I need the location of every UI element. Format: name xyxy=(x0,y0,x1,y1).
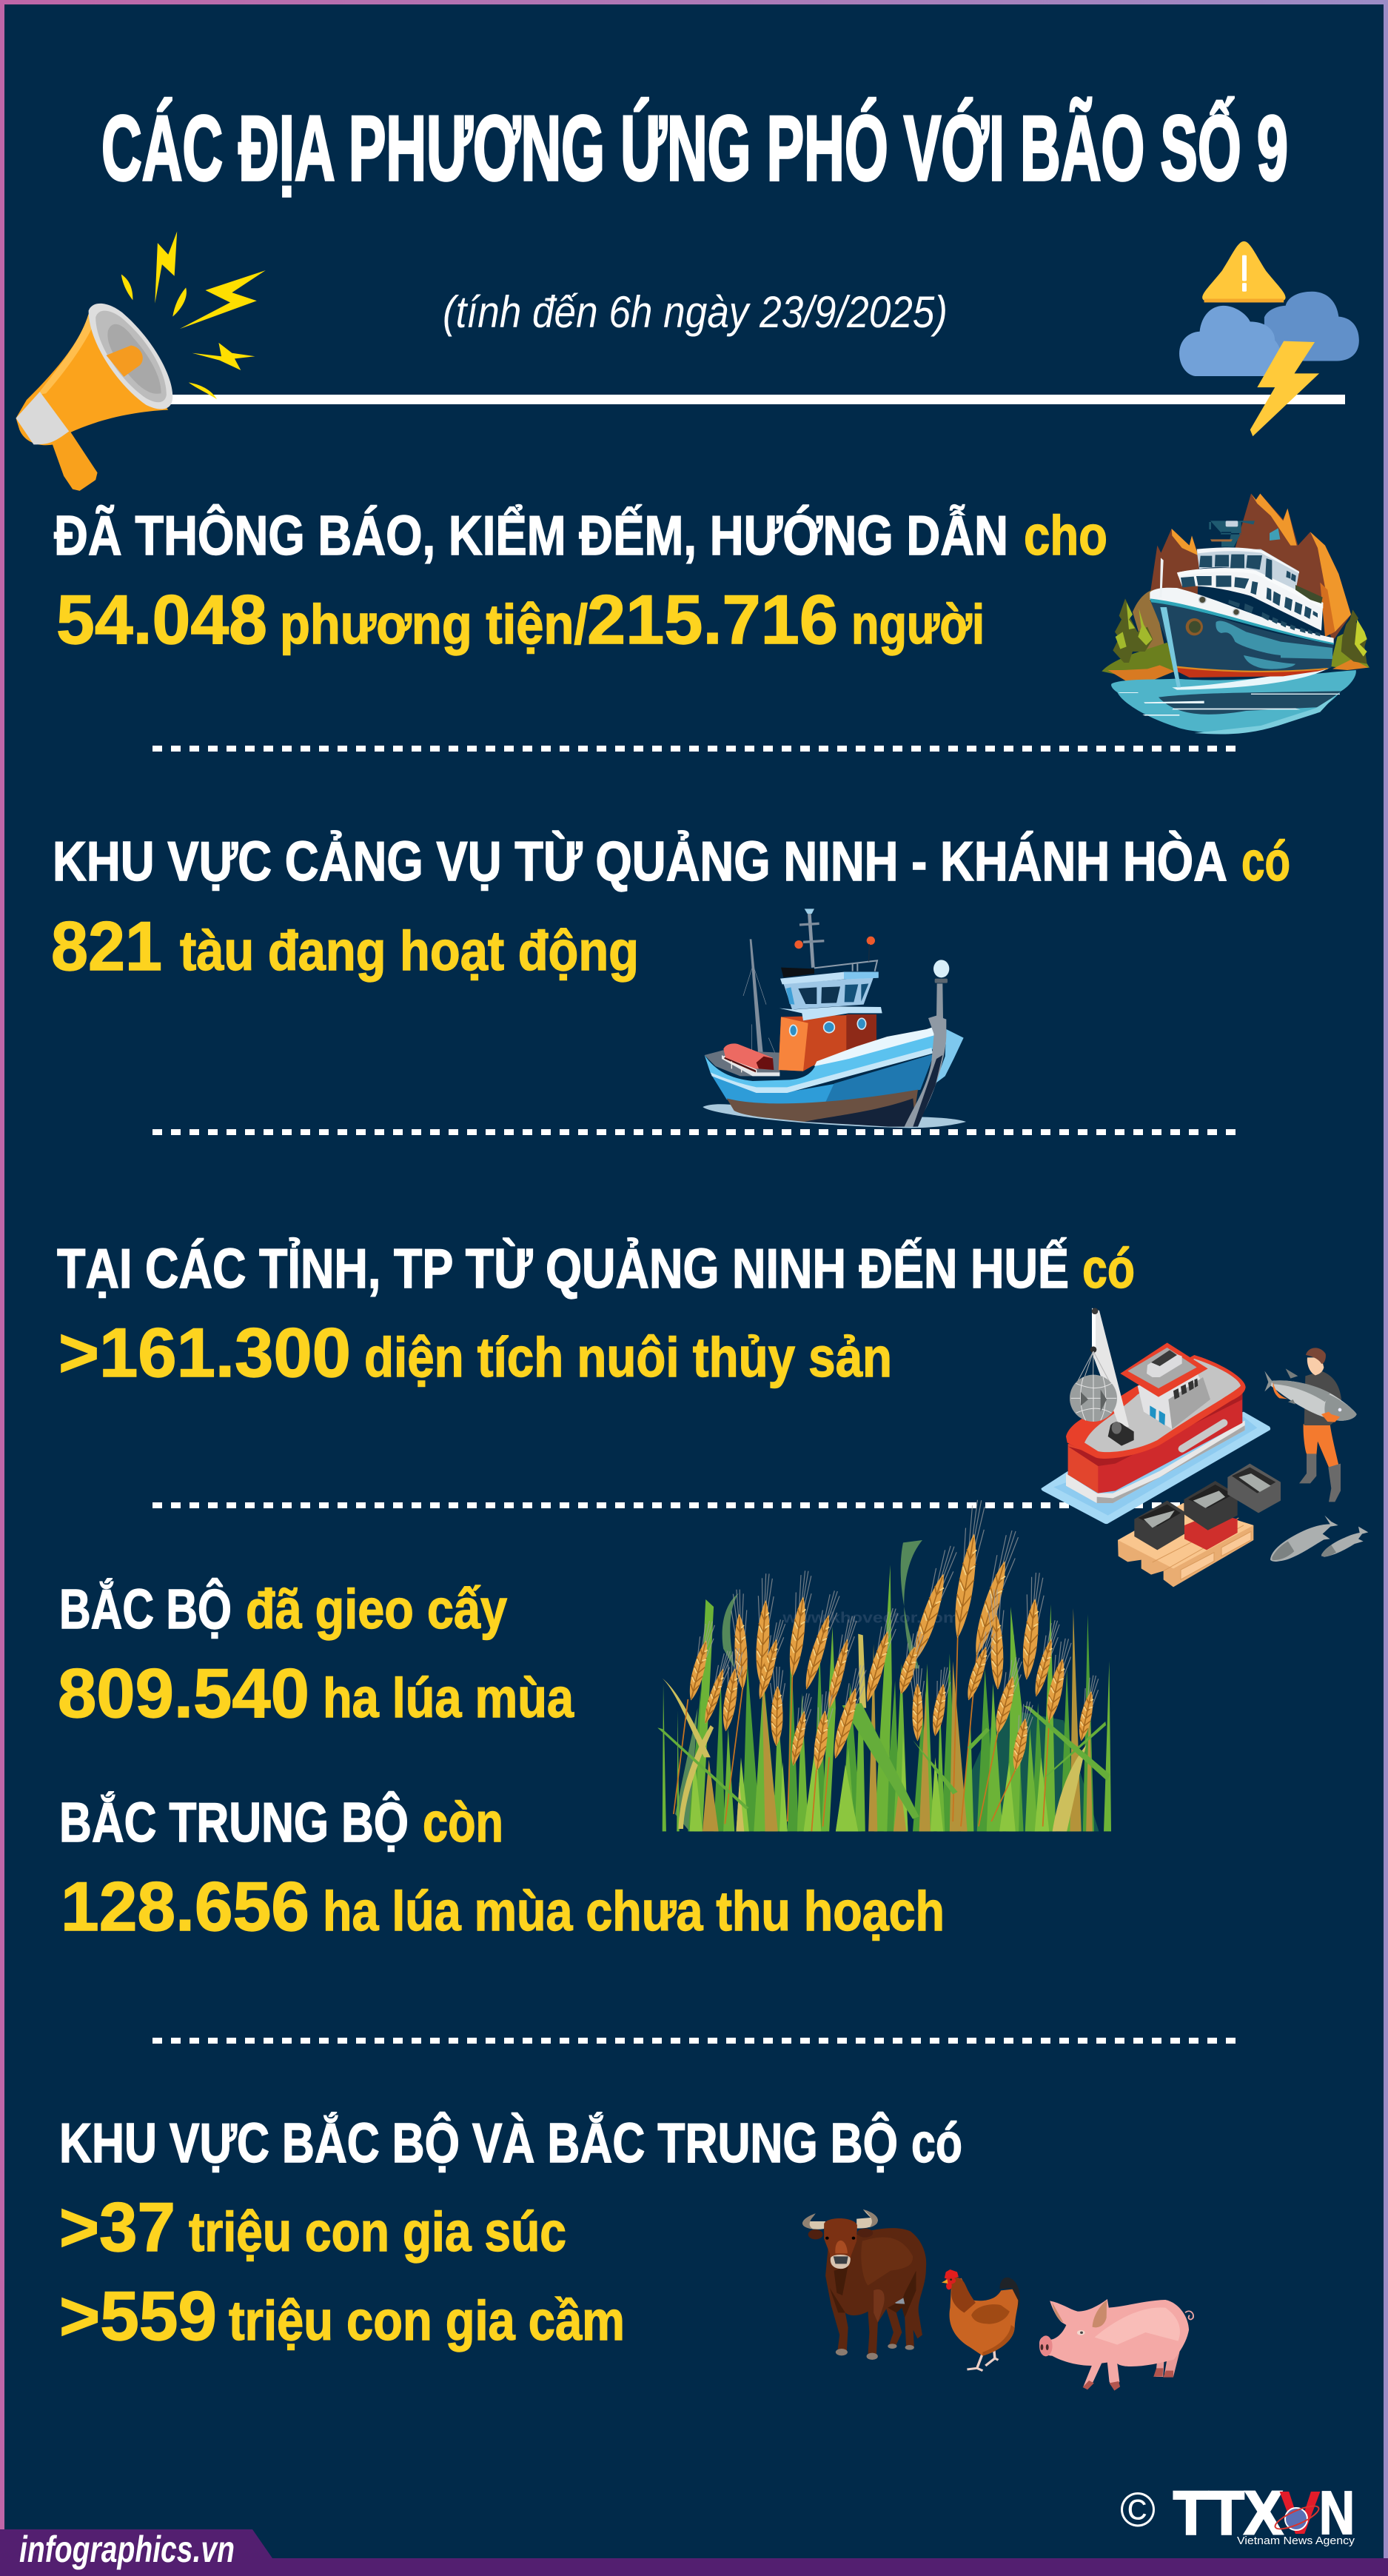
text block: rice north xyxy=(58,1578,574,1732)
text block: rice north central: BẮC TRUNG BỘ xyxy=(59,1791,409,1853)
water plate xyxy=(1042,1412,1270,1524)
text block: notified vessels and people: ĐÃ THÔNG BÁO, KIỂM ĐẾM, HƯỚNG DẪN xyxy=(54,504,1008,566)
text block: rice north: đã gieo cấy xyxy=(246,1578,507,1640)
text block: livestock: KHU VỰC BẮC BỘ VÀ BẮC TRUNG BỘ xyxy=(59,2112,898,2174)
pallet xyxy=(1118,1503,1253,1587)
big fish xyxy=(1271,1380,1357,1421)
logo: TTXVN: © xyxy=(1120,2482,1156,2537)
text block: livestock: có xyxy=(911,2112,962,2174)
icon: storm cloud with warning sign xyxy=(1179,241,1359,436)
crane and net xyxy=(1092,1308,1129,1429)
fish on ground xyxy=(1270,1516,1338,1562)
text block: notified vessels and people xyxy=(54,504,1107,658)
logo: TTXVN: Vietnam News Agency xyxy=(1237,2535,1355,2547)
text block: livestock: >37 xyxy=(59,2188,175,2266)
icon: trawler, crates, fisherman xyxy=(1042,1308,1368,1587)
logo: TTXVN: V xyxy=(1279,2478,1321,2547)
text block: livestock: triệu con gia cầm xyxy=(229,2289,625,2352)
cabin xyxy=(1138,1368,1210,1429)
text block: rice north central: còn xyxy=(423,1791,503,1853)
text block: aquaculture area xyxy=(57,1237,1135,1391)
icon: fishing boat xyxy=(703,909,966,1128)
text block: rice north: 809.540 xyxy=(58,1654,309,1732)
text block: rice north central: ha lúa mùa chưa thu hoạch xyxy=(323,1880,945,1942)
icon: rice field: www.khovector.com xyxy=(782,1610,959,1626)
footer: site name: infographics.vn xyxy=(19,2529,235,2570)
logo: TTXVN xyxy=(1120,2478,1355,2547)
dashed dividers xyxy=(152,749,1236,2041)
text block: aquaculture area: TẠI CÁC TỈNH, TP TỪ QUẢNG NINH ĐẾN HUẾ xyxy=(57,1237,1069,1299)
text block: notified vessels and people: 54.048 xyxy=(56,581,267,658)
subtitle: date: (tính đến 6h ngày 23/9/2025) xyxy=(443,287,948,337)
text block: livestock: triệu con gia súc xyxy=(189,2201,566,2263)
text block: vessels in port areas xyxy=(51,830,1290,985)
text block: livestock xyxy=(59,2112,962,2355)
text block: rice north: ha lúa mùa xyxy=(323,1667,574,1729)
text block: rice north: BẮC BỘ xyxy=(59,1578,232,1640)
text block: vessels in port areas: 821 xyxy=(51,907,162,985)
text block: notified vessels and people: phương tiện/ xyxy=(280,593,588,655)
icon: bull xyxy=(802,2209,926,2360)
text block: notified vessels and people: 215.716 xyxy=(587,581,838,658)
footer band xyxy=(0,2529,1388,2576)
text block: vessels in port areas: có xyxy=(1241,830,1290,892)
header rule xyxy=(167,395,1345,404)
text block: notified vessels and people: cho xyxy=(1024,504,1107,566)
hull xyxy=(1066,1420,1245,1503)
text block: livestock: >559 xyxy=(59,2277,217,2355)
text block: rice north central xyxy=(59,1791,945,1945)
text block: aquaculture area: có xyxy=(1082,1237,1135,1299)
winch xyxy=(1108,1422,1134,1446)
text block: vessels in port areas: tàu đang hoạt động xyxy=(180,920,639,982)
icon: pig xyxy=(1039,2299,1193,2391)
text block: aquaculture area: diện tích nuôi thủy sản xyxy=(364,1326,892,1388)
icon: megaphone with lightning xyxy=(16,231,266,491)
text block: rice north central: 128.656 xyxy=(61,1867,309,1945)
text block: aquaculture area: >161.300 xyxy=(58,1314,351,1391)
icon: passenger ship with mountains xyxy=(1102,494,1369,735)
fisherman xyxy=(1304,1424,1338,1468)
crates xyxy=(1134,1501,1184,1550)
text block: notified vessels and people: người xyxy=(851,593,985,655)
icon: chicken xyxy=(942,2269,1020,2371)
logo: TTXVN: N xyxy=(1319,2478,1355,2547)
icon: rice field xyxy=(657,1499,1111,1831)
logo: TTXVN: TTX xyxy=(1173,2478,1283,2547)
